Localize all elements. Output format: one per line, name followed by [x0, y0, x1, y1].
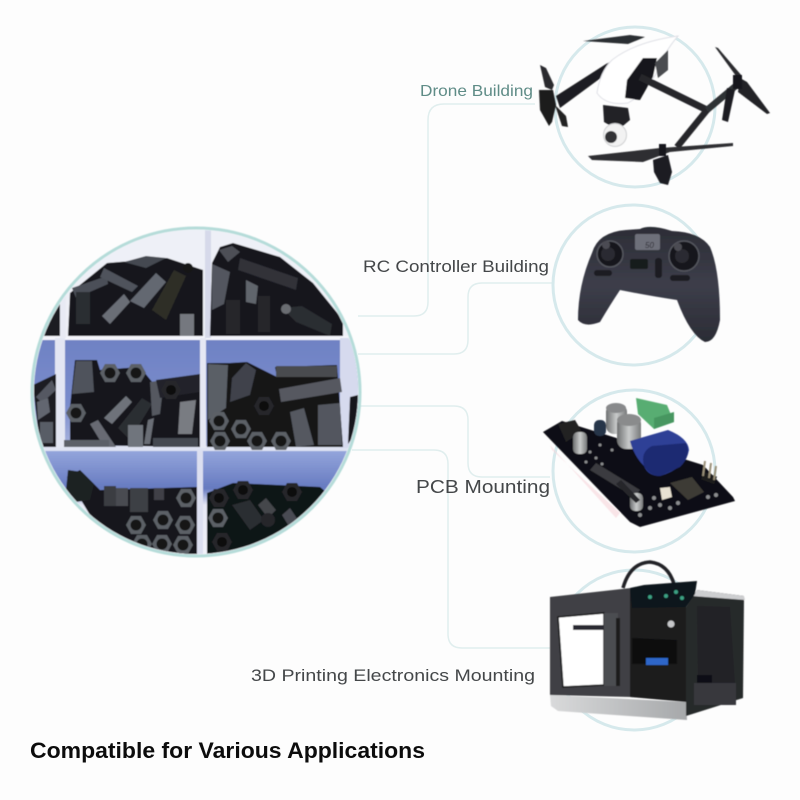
top-left compartment: standoffs — [44, 256, 203, 336]
icon ring: controller — [553, 205, 713, 365]
icon: 3D printer — [550, 562, 745, 720]
centre column — [630, 590, 686, 702]
gimbal and camera — [603, 105, 630, 130]
title: Compatible for Various Applications — [30, 738, 425, 763]
label: 3D Printing Electronics Mounting: 3D Printing Electronics Mounting — [251, 666, 535, 685]
front panel — [550, 588, 631, 697]
header pins — [701, 472, 717, 484]
base — [550, 695, 687, 720]
far-right sliver — [348, 395, 358, 444]
inductor — [558, 420, 582, 442]
bottom propeller — [588, 143, 733, 162]
green terminal — [636, 398, 674, 429]
traces — [590, 463, 640, 497]
body panels — [625, 58, 657, 100]
icon: drone — [539, 35, 770, 185]
bottom-left compartment: nuts — [66, 470, 197, 556]
connector lines — [352, 104, 553, 648]
icon ring: 3D printer — [554, 570, 714, 730]
label: PCB Mounting: PCB Mounting — [416, 477, 550, 497]
crystal and parts — [670, 477, 704, 500]
left arm — [556, 60, 614, 108]
power button — [668, 620, 674, 628]
middle-left compartment: hex standoffs and nuts — [33, 360, 200, 447]
left motor and blades — [540, 65, 554, 90]
right stick — [669, 241, 699, 271]
left stick — [597, 241, 623, 267]
handle — [623, 562, 674, 588]
icon: RC controller — [578, 227, 720, 342]
screen — [635, 234, 660, 250]
silver capacitors — [606, 403, 641, 449]
nozzle bay and blue display — [632, 638, 677, 664]
bottom motor — [653, 155, 672, 185]
icon ring: drone — [555, 27, 715, 187]
top-right compartment: standoffs — [210, 243, 343, 336]
bottom-right compartment: nuts and screws — [206, 480, 325, 554]
surface-mount parts — [584, 444, 718, 517]
side window and vents — [697, 606, 735, 685]
body — [597, 36, 678, 104]
screen value: 50 — [645, 241, 654, 250]
right side — [686, 590, 744, 716]
buttons — [630, 259, 648, 269]
touch screen — [630, 581, 697, 608]
label: Drone Building: Drone Building — [420, 83, 533, 100]
icon: PCB — [543, 398, 735, 527]
blue capacitors — [630, 430, 689, 476]
top propeller — [583, 35, 645, 44]
middle-right compartment: hex standoffs and nuts — [207, 362, 343, 450]
window — [558, 613, 604, 687]
tray background rows — [30, 228, 365, 560]
label: RC Controller Building: RC Controller Building — [363, 257, 549, 276]
icon ring: PCB — [553, 390, 715, 552]
right motor and blades — [715, 47, 742, 76]
main arms — [640, 77, 707, 110]
panel: product photo circle — [30, 228, 365, 560]
small silver capacitor — [573, 432, 587, 454]
